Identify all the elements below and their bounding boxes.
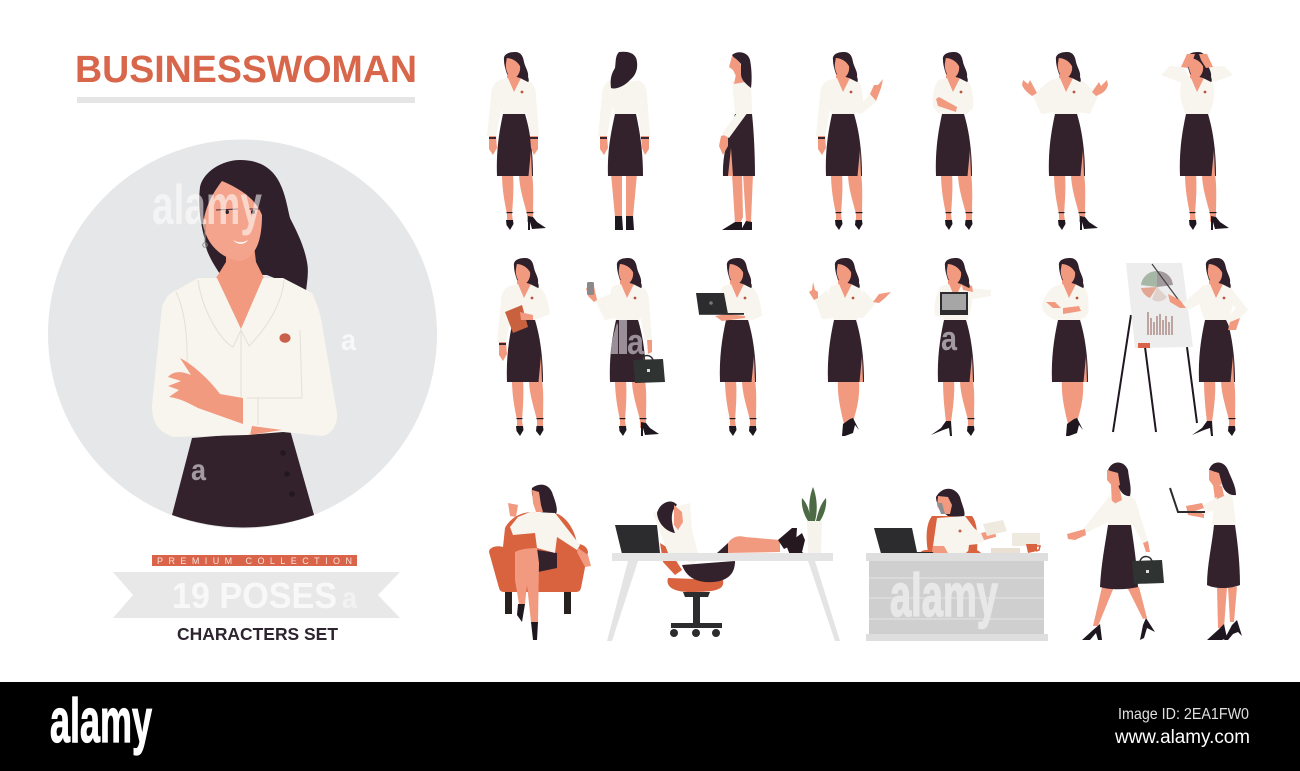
laptop screen facing viewer <box>940 292 968 315</box>
watermark: a right: a <box>341 324 356 357</box>
ribbon <box>113 572 400 618</box>
portrait badge <box>280 333 290 343</box>
pose 11: shrug, open palms <box>809 258 891 436</box>
portrait crossed forearm and hand <box>168 358 243 424</box>
watermark: a on skirt: a <box>941 320 958 358</box>
pose 14: presenter <box>1113 258 1248 436</box>
armchair woman <box>508 485 591 640</box>
portrait blouse <box>152 278 337 437</box>
portrait hair <box>199 160 308 291</box>
pose 17: at reception desk <box>866 489 1048 641</box>
watermark: la on skirt <box>611 320 645 362</box>
premium collection bar <box>152 555 357 566</box>
pose 9: phone and briefcase <box>586 258 665 436</box>
pose 6: shrug both arms <box>1022 52 1108 230</box>
desk <box>607 553 840 641</box>
pose 3: side view <box>719 52 755 230</box>
watermark: alamy on portrait: alamy <box>152 173 262 236</box>
papers, stack and mug <box>983 520 1040 553</box>
portrait skirt buttons <box>280 450 295 497</box>
pose 8: holding folder <box>497 258 550 436</box>
title: BUSINESSWOMAN <box>75 49 417 91</box>
desk chair back <box>927 516 977 552</box>
title underline <box>77 97 415 103</box>
portrait neck <box>216 245 264 330</box>
portrait blouse lines <box>176 280 302 425</box>
pose 19: walking with open laptop <box>1170 462 1242 640</box>
footer bar <box>0 682 1300 771</box>
reception desk <box>866 553 1048 641</box>
portrait face <box>203 181 262 261</box>
desk woman <box>920 489 996 553</box>
ribbon text: 19 POSES <box>172 575 337 616</box>
pose 16: desk with feet up <box>607 487 840 641</box>
pose 13: crossed arms <box>1042 258 1089 436</box>
watermark: a on ribbon: a <box>342 582 357 615</box>
portrait circle <box>48 140 437 528</box>
laptop on desk <box>615 525 678 554</box>
pose 18: walking with briefcase <box>1067 462 1164 640</box>
watermark: alamy on desk: alamy <box>890 562 998 629</box>
pose 15: sitting in armchair <box>489 485 591 640</box>
subtitle: CHARACTERS SET <box>177 624 338 644</box>
pose 2: back view <box>598 52 650 230</box>
portrait facial features <box>203 209 262 247</box>
pose 7: hands on head <box>1161 52 1233 230</box>
reclining woman <box>653 502 806 582</box>
office chair <box>660 543 723 637</box>
footer logo: alamy <box>50 687 152 756</box>
presenter woman <box>1168 258 1248 436</box>
pose 5: hand to mouth <box>933 52 973 230</box>
watermark: la on skirt: a <box>627 321 645 362</box>
potted plant <box>802 487 826 553</box>
presenter flip chart <box>1113 263 1197 432</box>
premium collection label: PREMIUM COLLECTION <box>157 556 352 566</box>
footer website: www.alamy.com <box>1114 727 1250 748</box>
portrait skirt <box>172 430 314 528</box>
watermark: a on skirt: a <box>191 454 206 487</box>
pose 12: holding laptop in front <box>931 258 991 436</box>
portrait belly <box>250 426 282 435</box>
armchair <box>489 512 588 614</box>
panel: portrait <box>48 140 437 528</box>
desk laptop <box>874 528 933 554</box>
pose 1: front standing <box>487 52 546 230</box>
pose 10: holding laptop at side <box>696 258 762 436</box>
pose 4: one hand raised <box>816 52 883 230</box>
footer image id: Image ID: 2EA1FW0 <box>1118 706 1249 723</box>
